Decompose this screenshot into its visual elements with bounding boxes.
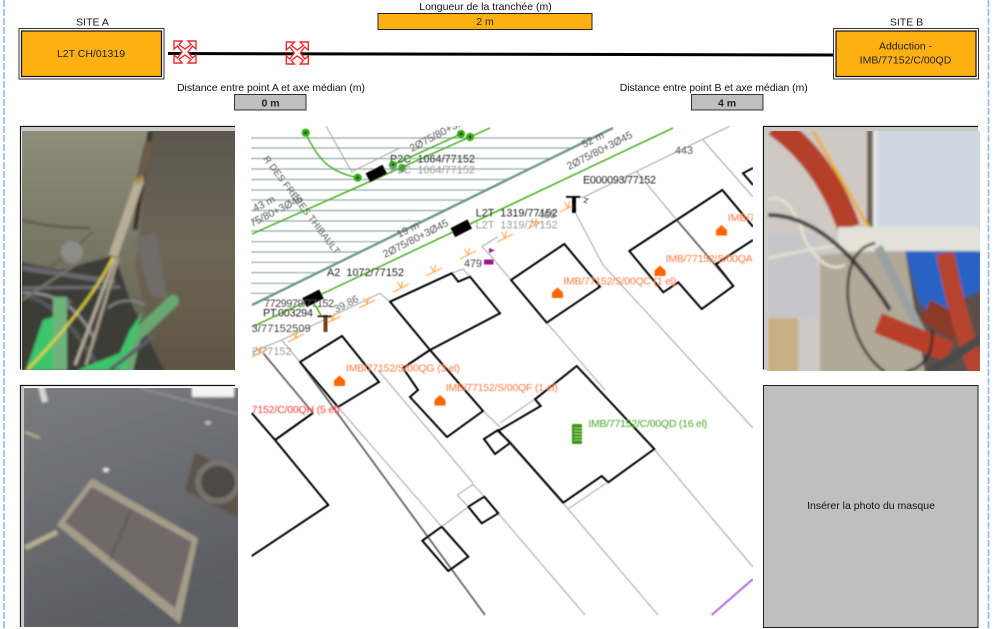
map labels: 75/80+3Ø45 [248, 193, 305, 230]
map labels: IMB/77152/S/00QF (1 el) [446, 382, 558, 394]
site A block: SITE A [76, 16, 109, 28]
site A block: L2T CH/01319 [57, 48, 125, 60]
map labels: 39.86 [332, 293, 361, 316]
purple route [712, 579, 753, 615]
poles [324, 315, 328, 332]
map labels: IMB/77152/S/00QG (3 el) [346, 362, 460, 374]
ticks [252, 201, 576, 357]
photo: site A pavement manhole covers [20, 386, 241, 629]
distance from point B [620, 82, 808, 110]
building icon green [572, 424, 582, 444]
fibre routes [252, 128, 673, 327]
map labels: IMB/77152/S/00QC (1 el) [563, 276, 676, 288]
site B block: IMB/77152/C/00QD [860, 54, 952, 66]
distance from point B: 4 m [718, 98, 736, 110]
map labels: A2 1072/77152 [327, 267, 404, 279]
trench length label and value: 2 m [476, 16, 494, 28]
map labels: R DES FRERES THIBAULT [261, 154, 342, 257]
trench length label and value: Longueur de la tranchée (m) [419, 1, 552, 13]
map labels: 479 [464, 258, 482, 270]
distance from point A [177, 82, 365, 110]
purple markers [489, 248, 495, 253]
map labels: L2T 1319/77152 [476, 220, 558, 232]
placeholder panel: mask photo [764, 386, 978, 628]
right dashed page edge [988, 0, 990, 629]
trench length label and value [378, 1, 592, 30]
map labels: P2C 1064/77152 [390, 164, 475, 176]
map labels: 465 [538, 209, 556, 221]
photo: site B cable entry [764, 125, 982, 373]
map labels: 2Ø75/80+3Ø45 [565, 129, 635, 173]
parcel boundaries [252, 126, 753, 615]
thick grey boundaries [263, 220, 733, 615]
network nodes [302, 129, 474, 181]
map labels: 2Ø75/80+3Ø45 [408, 110, 477, 155]
map labels: 19 m [395, 219, 421, 241]
map labels: 52 m [580, 129, 606, 151]
map labels [251, 126, 753, 430]
map labels: 2Ø75/80+3Ø45 [381, 217, 451, 261]
map labels: 2/77152 [252, 346, 292, 358]
map labels: 3/77152509 [252, 323, 311, 335]
map labels: E000093/77152 [583, 174, 656, 186]
map labels: 443 [675, 145, 693, 157]
distance from point A: Distance entre point A et axe médian (m) [177, 82, 365, 94]
street edge [252, 128, 613, 305]
cadastral network map [248, 110, 779, 615]
site A block [19, 16, 164, 79]
street hatching [251, 138, 593, 293]
site B block: Adduction - [879, 40, 933, 52]
map labels: L2T 1319/77152 [476, 208, 558, 220]
map labels: IMB/77152/S/00QA [666, 253, 753, 265]
icon: manhole marker 2 [286, 42, 308, 64]
splice boxes [366, 165, 387, 182]
map labels: 43 m [251, 193, 277, 215]
buildings [252, 168, 753, 571]
house icons [334, 225, 727, 406]
left dashed page edge [3, 0, 5, 629]
map labels: 7152/C/00QH (5 el) [252, 404, 340, 416]
icon: manhole marker 1 [174, 41, 196, 63]
map labels: PT.003294 [263, 308, 313, 320]
distance from point B: Distance entre point B et axe médian (m) [620, 82, 808, 94]
site B block: SITE B [890, 16, 923, 28]
map labels: 7729979/77152 [264, 298, 334, 310]
trench line between sites [168, 54, 835, 55]
map labels: P2C 1064/77152 [390, 154, 475, 166]
site B block [834, 16, 978, 79]
map labels: IMB/77152 [728, 212, 779, 224]
placeholder panel: mask photo: Insérer la photo du masque [807, 500, 935, 512]
distance from point A: 0 m [261, 98, 280, 110]
photo: site A chamber with cables [20, 126, 238, 372]
map labels: IMB/77152/C/00QD (16 el) [588, 418, 707, 430]
